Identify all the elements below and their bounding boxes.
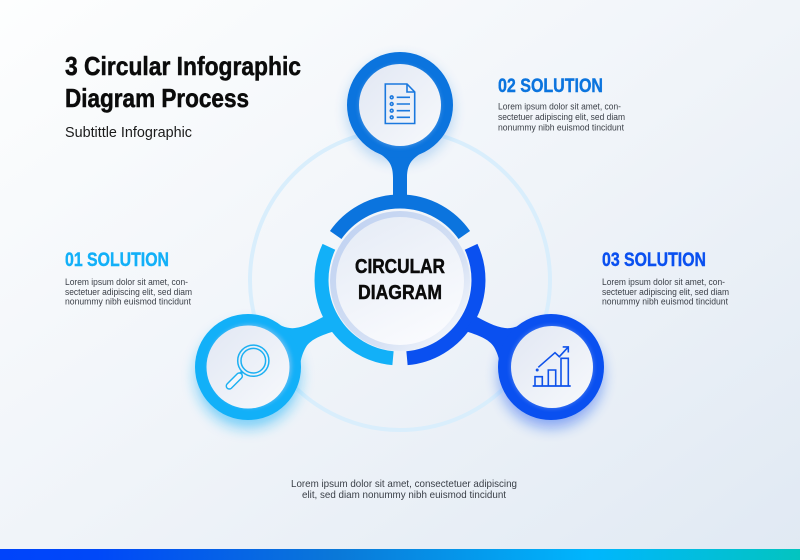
block 01 solution: nonummy nibh euismod tincidunt bbox=[65, 296, 191, 306]
gradient bottom bar bbox=[0, 549, 800, 560]
block 01 solution: Lorem ipsum dolor sit amet, con- bbox=[65, 277, 188, 287]
center label: DIAGRAM bbox=[358, 282, 442, 304]
block 03 solution: 03 SOLUTION bbox=[602, 250, 706, 271]
node 03: right bbox=[465, 314, 604, 420]
block 03 solution bbox=[602, 250, 729, 306]
ring segment: right bbox=[407, 247, 478, 358]
center label: CIRCULAR bbox=[355, 256, 445, 278]
block 01 solution bbox=[65, 250, 192, 306]
block 03 solution: Lorem ipsum dolor sit amet, con- bbox=[602, 277, 725, 287]
icon: bar chart with arrow bbox=[533, 347, 571, 386]
ring segment: top bbox=[336, 202, 464, 235]
subtitle: Subtittle Infographic bbox=[65, 124, 192, 141]
bottom text block: elit, sed diam nonummy nibh euismod tincidunt bbox=[302, 489, 506, 501]
block 03 solution: sectetuer adipiscing elit, sed diam bbox=[602, 287, 729, 297]
node shadows bbox=[196, 58, 603, 428]
title bbox=[65, 51, 301, 113]
block 02 solution: 02 SOLUTION bbox=[498, 76, 603, 97]
bottom text block: Lorem ipsum dolor sit amet, consectetuer adipiscing bbox=[291, 478, 517, 490]
block 01 solution: sectetuer adipiscing elit, sed diam bbox=[65, 287, 192, 297]
large pale connecting ring bbox=[250, 130, 550, 430]
block 02 solution: nonummy nibh euismod tincidunt bbox=[498, 122, 624, 132]
block 02 solution bbox=[498, 76, 625, 132]
icon: document bbox=[385, 84, 415, 124]
node 01: left bbox=[195, 314, 335, 420]
center disc bbox=[330, 211, 470, 351]
center segmented ring bbox=[322, 202, 478, 358]
ring segment: left bbox=[322, 247, 393, 358]
icon: magnifying glass bbox=[229, 345, 269, 386]
block 03 solution: nonummy nibh euismod tincidunt bbox=[602, 296, 728, 306]
title: Diagram Process bbox=[65, 83, 249, 113]
center label bbox=[355, 256, 445, 304]
block 02 solution: sectetuer adipiscing elit, sed diam bbox=[498, 112, 625, 122]
block 02 solution: Lorem ipsum dolor sit amet, con- bbox=[498, 102, 621, 112]
bottom text block bbox=[291, 478, 517, 501]
node 02: top bbox=[347, 52, 453, 200]
title: 3 Circular Infographic bbox=[65, 51, 301, 81]
block 01 solution: 01 SOLUTION bbox=[65, 250, 169, 271]
